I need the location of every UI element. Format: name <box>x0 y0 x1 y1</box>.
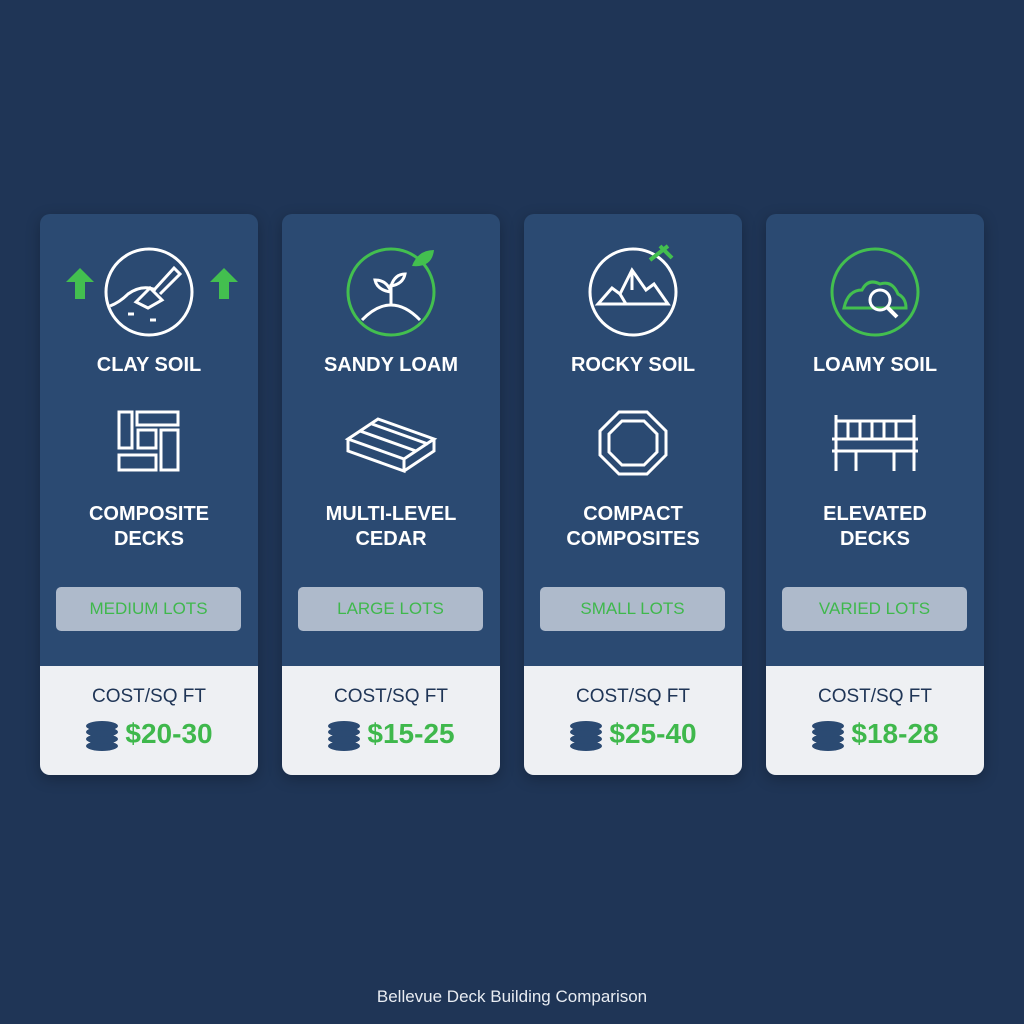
cost section: COST/SQ FT <box>818 686 932 707</box>
pill: SMALL LOTS <box>580 599 685 618</box>
label: COMPACT <box>583 503 683 525</box>
cost section: $25-40 <box>609 718 697 749</box>
label <box>566 503 700 550</box>
icon: octagon <box>598 410 668 476</box>
label: COMPOSITES <box>566 528 700 550</box>
label: COMPOSITE <box>89 503 209 525</box>
pill: VARIED LOTS <box>819 599 930 618</box>
label: MULTI-LEVEL <box>326 503 456 525</box>
footer caption: Bellevue Deck Building Comparison <box>377 987 647 1006</box>
icon: sprout <box>346 248 436 336</box>
cost section: COST/SQ FT <box>334 686 448 707</box>
label <box>326 503 456 550</box>
label <box>89 503 209 550</box>
icon: composite boards <box>118 410 180 472</box>
cost section: $18-28 <box>851 718 939 749</box>
pill: LARGE LOTS <box>337 599 444 618</box>
label <box>823 503 927 550</box>
cost section <box>40 666 258 775</box>
pill <box>782 587 967 631</box>
label: DECKS <box>114 528 184 550</box>
card: sandy loam <box>282 214 500 775</box>
icon: mound with magnifier <box>830 248 920 336</box>
heading: LOAMY SOIL <box>813 354 937 376</box>
icon: clay soil trowel <box>66 248 238 336</box>
icon: elevated deck <box>832 415 918 471</box>
icon: rocks and pick <box>588 244 678 336</box>
pill <box>56 587 241 631</box>
card: rocky soil <box>524 214 742 775</box>
label: DECKS <box>840 528 910 550</box>
card: loamy soil <box>766 214 984 775</box>
cost section: $15-25 <box>367 718 455 749</box>
cost section <box>766 666 984 775</box>
pill <box>298 587 483 631</box>
cost section: COST/SQ FT <box>576 686 690 707</box>
label: CEDAR <box>355 528 427 550</box>
heading: ROCKY SOIL <box>571 354 695 376</box>
heading: CLAY SOIL <box>97 354 201 376</box>
heading: SANDY LOAM <box>324 354 458 376</box>
card: clay soil <box>40 214 258 775</box>
label: ELEVATED <box>823 503 927 525</box>
cost section: $20-30 <box>125 718 213 749</box>
pill <box>540 587 725 631</box>
cost section: COST/SQ FT <box>92 686 206 707</box>
cost section <box>524 666 742 775</box>
cost section <box>282 666 500 775</box>
pill: MEDIUM LOTS <box>89 599 208 618</box>
icon: stacked planks <box>344 417 438 474</box>
